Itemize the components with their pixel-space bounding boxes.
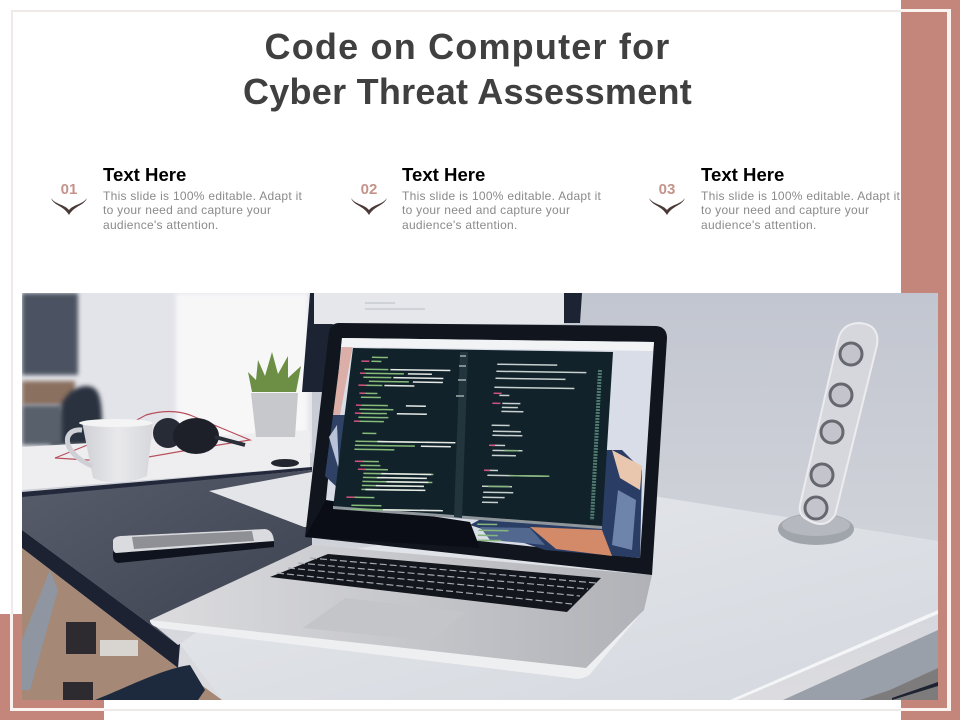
description 03 [701,188,900,232]
dark desk [22,470,312,668]
description 01: audience's attention. [103,218,219,232]
headphones and red cable [55,412,250,462]
small black clip [271,459,299,467]
coffee cup [67,419,153,482]
icon: brace [649,198,685,215]
laptop lid and screen [305,323,667,575]
description 02: to your need and capture your [402,203,570,217]
description 02: audience's attention. [402,218,518,232]
description 01 [103,188,302,232]
description 01: This slide is 100% editable. Adapt it [103,188,302,202]
description 01: to your need and capture your [103,203,271,217]
heading 03: Text Here [701,164,784,185]
heading 01: Text Here [103,164,186,185]
title: Cyber Threat Assessment [243,70,692,112]
phone [113,529,274,563]
title: Code on Computer for [264,26,670,67]
decorative frame highlight bottom left [10,614,104,711]
description 02: This slide is 100% editable. Adapt it [402,188,601,202]
wireless keyboard [209,472,312,527]
decorative pink block bottom left [0,614,104,720]
feature item 01 [51,164,302,232]
background walls [22,293,938,700]
laptop base [150,545,652,679]
icon: brace [351,198,387,215]
description 02 [402,188,601,232]
description 03: audience's attention. [701,218,817,232]
title [243,26,692,112]
under desk cardboard box and leg [22,548,222,700]
code lines [339,357,588,542]
back shelf with keyboard edge [22,430,312,498]
photo: laptop showing code on a desk [22,293,938,700]
icon: brace [51,198,87,215]
code editor window [333,348,613,542]
number 01: 01 [61,181,77,198]
decorative pink band right [901,0,960,720]
translucent speaker tube [778,323,877,545]
decorative frame highlight over pink [901,9,951,711]
number 02: 02 [361,181,377,198]
description 03: This slide is 100% editable. Adapt it [701,188,900,202]
display wallpaper [305,338,654,558]
background monitor [302,293,582,392]
white desk, right [180,494,938,700]
number 03: 03 [659,181,675,198]
plant in metal pot [248,352,301,437]
description 03: to your need and capture your [701,203,869,217]
feature item 03 [649,164,900,232]
heading 02: Text Here [402,164,485,185]
feature item 02 [351,164,601,232]
